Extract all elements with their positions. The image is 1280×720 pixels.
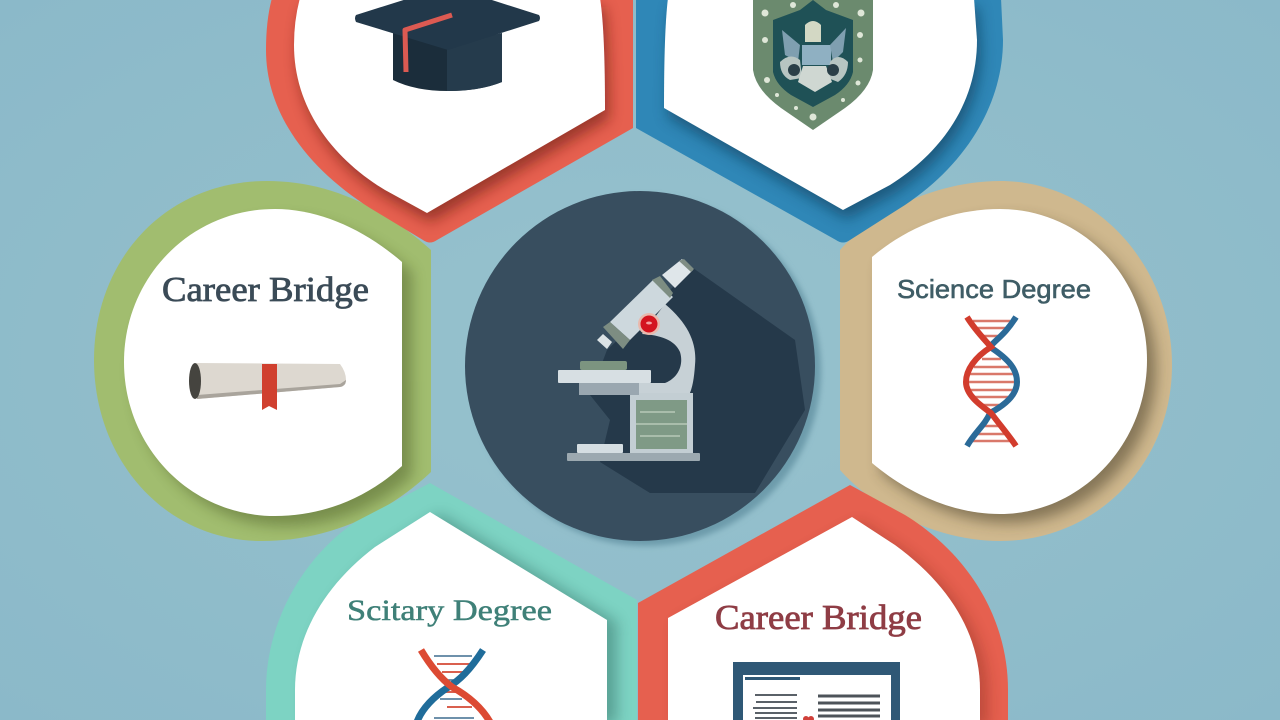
- icon: shield emblem: [753, 0, 873, 130]
- panel: blue emblem: [636, 0, 1003, 242]
- icon: microscope: [558, 259, 700, 461]
- panel: red Career Bridge: [638, 485, 1008, 720]
- icon: graduation cap: [355, 0, 540, 91]
- panel: green Career Bridge: [94, 181, 431, 541]
- long shadow: [590, 268, 805, 493]
- heading: Career Bridge: Career Bridge: [715, 598, 922, 637]
- heading: Career Bridge: Career Bridge: [162, 270, 369, 309]
- icon: document: [733, 662, 900, 720]
- panel: teal Scitary Degree: [266, 483, 637, 720]
- heading: Science Degree: Science Degree: [897, 274, 1091, 304]
- icon: diploma scroll: [189, 363, 346, 410]
- icon: DNA helix: [966, 317, 1017, 446]
- panel: beige Science Degree: [840, 181, 1172, 541]
- icon: DNA helix cropped: [417, 650, 490, 720]
- panel: central microscope circle: [465, 191, 821, 546]
- heading: Scitary Degree: Scitary Degree: [347, 594, 552, 627]
- panel: red graduation cap: [266, 0, 633, 242]
- microscope arm: [637, 304, 695, 397]
